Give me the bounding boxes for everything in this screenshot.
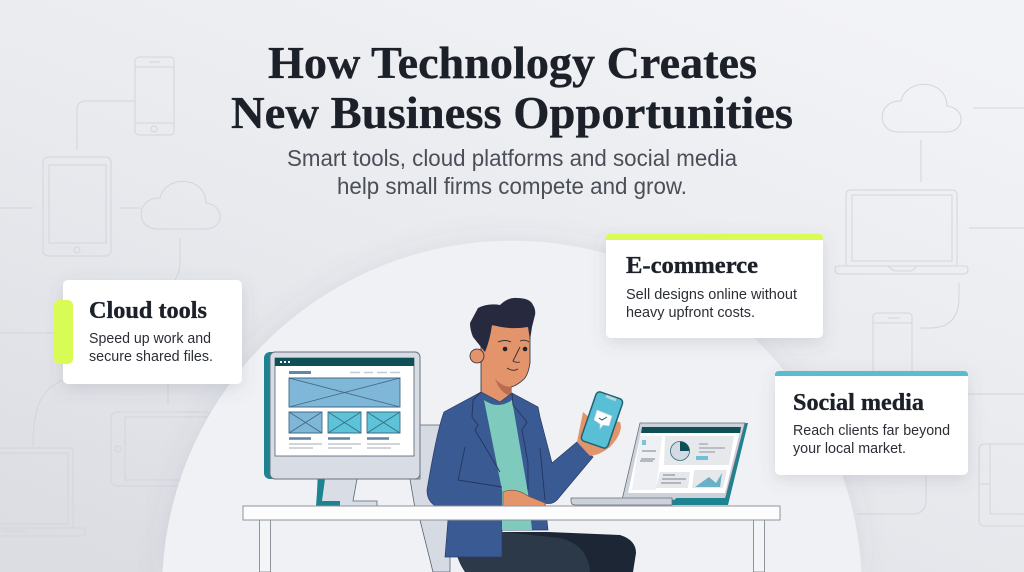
title [231,37,793,138]
trousers [457,532,636,572]
subtitle: help small firms compete and grow. [337,173,687,199]
card: cloud tools [54,280,242,384]
laptop [571,423,748,505]
card: social media [775,371,968,475]
laptop dashboard [632,436,662,490]
eyes and smile [505,347,525,351]
chair [410,425,450,572]
laptop base [571,498,672,505]
body: heavy upfront costs. [626,305,755,321]
smartphone [580,391,624,449]
body [793,423,950,457]
accent tab [54,300,73,364]
typing hand [503,490,545,506]
hair [470,298,535,352]
t-shirt [484,400,532,530]
neck and face [481,325,530,408]
title: How Technology Creates [268,37,757,88]
holding hand [577,412,621,456]
wireframe thumbnails [289,412,322,433]
subtitle: Smart tools, cloud platforms and social media [287,145,737,171]
body: Speed up work and [89,331,211,347]
jacket lapels and seams [458,392,545,500]
monitor stand [317,479,377,506]
accent bar [606,234,823,240]
heading: Cloud tools [89,298,207,324]
body: Sell designs online without [626,287,797,303]
card: e-commerce [606,234,823,338]
title: New Business Opportunities [231,87,793,138]
body: Reach clients far beyond [793,423,950,439]
heading: E-commerce [626,253,758,279]
desk [243,506,780,572]
body: secure shared files. [89,349,213,365]
body: your local market. [793,441,906,457]
ear [470,349,484,363]
wireframe hero [289,378,400,407]
body [89,331,213,365]
person [427,298,636,572]
heading: Social media [793,390,924,416]
accent bar [775,371,968,376]
jacket [427,392,593,557]
body [626,287,797,321]
central backdrop circle [162,241,862,572]
subtitle [287,145,737,199]
desktop monitor [264,352,420,506]
